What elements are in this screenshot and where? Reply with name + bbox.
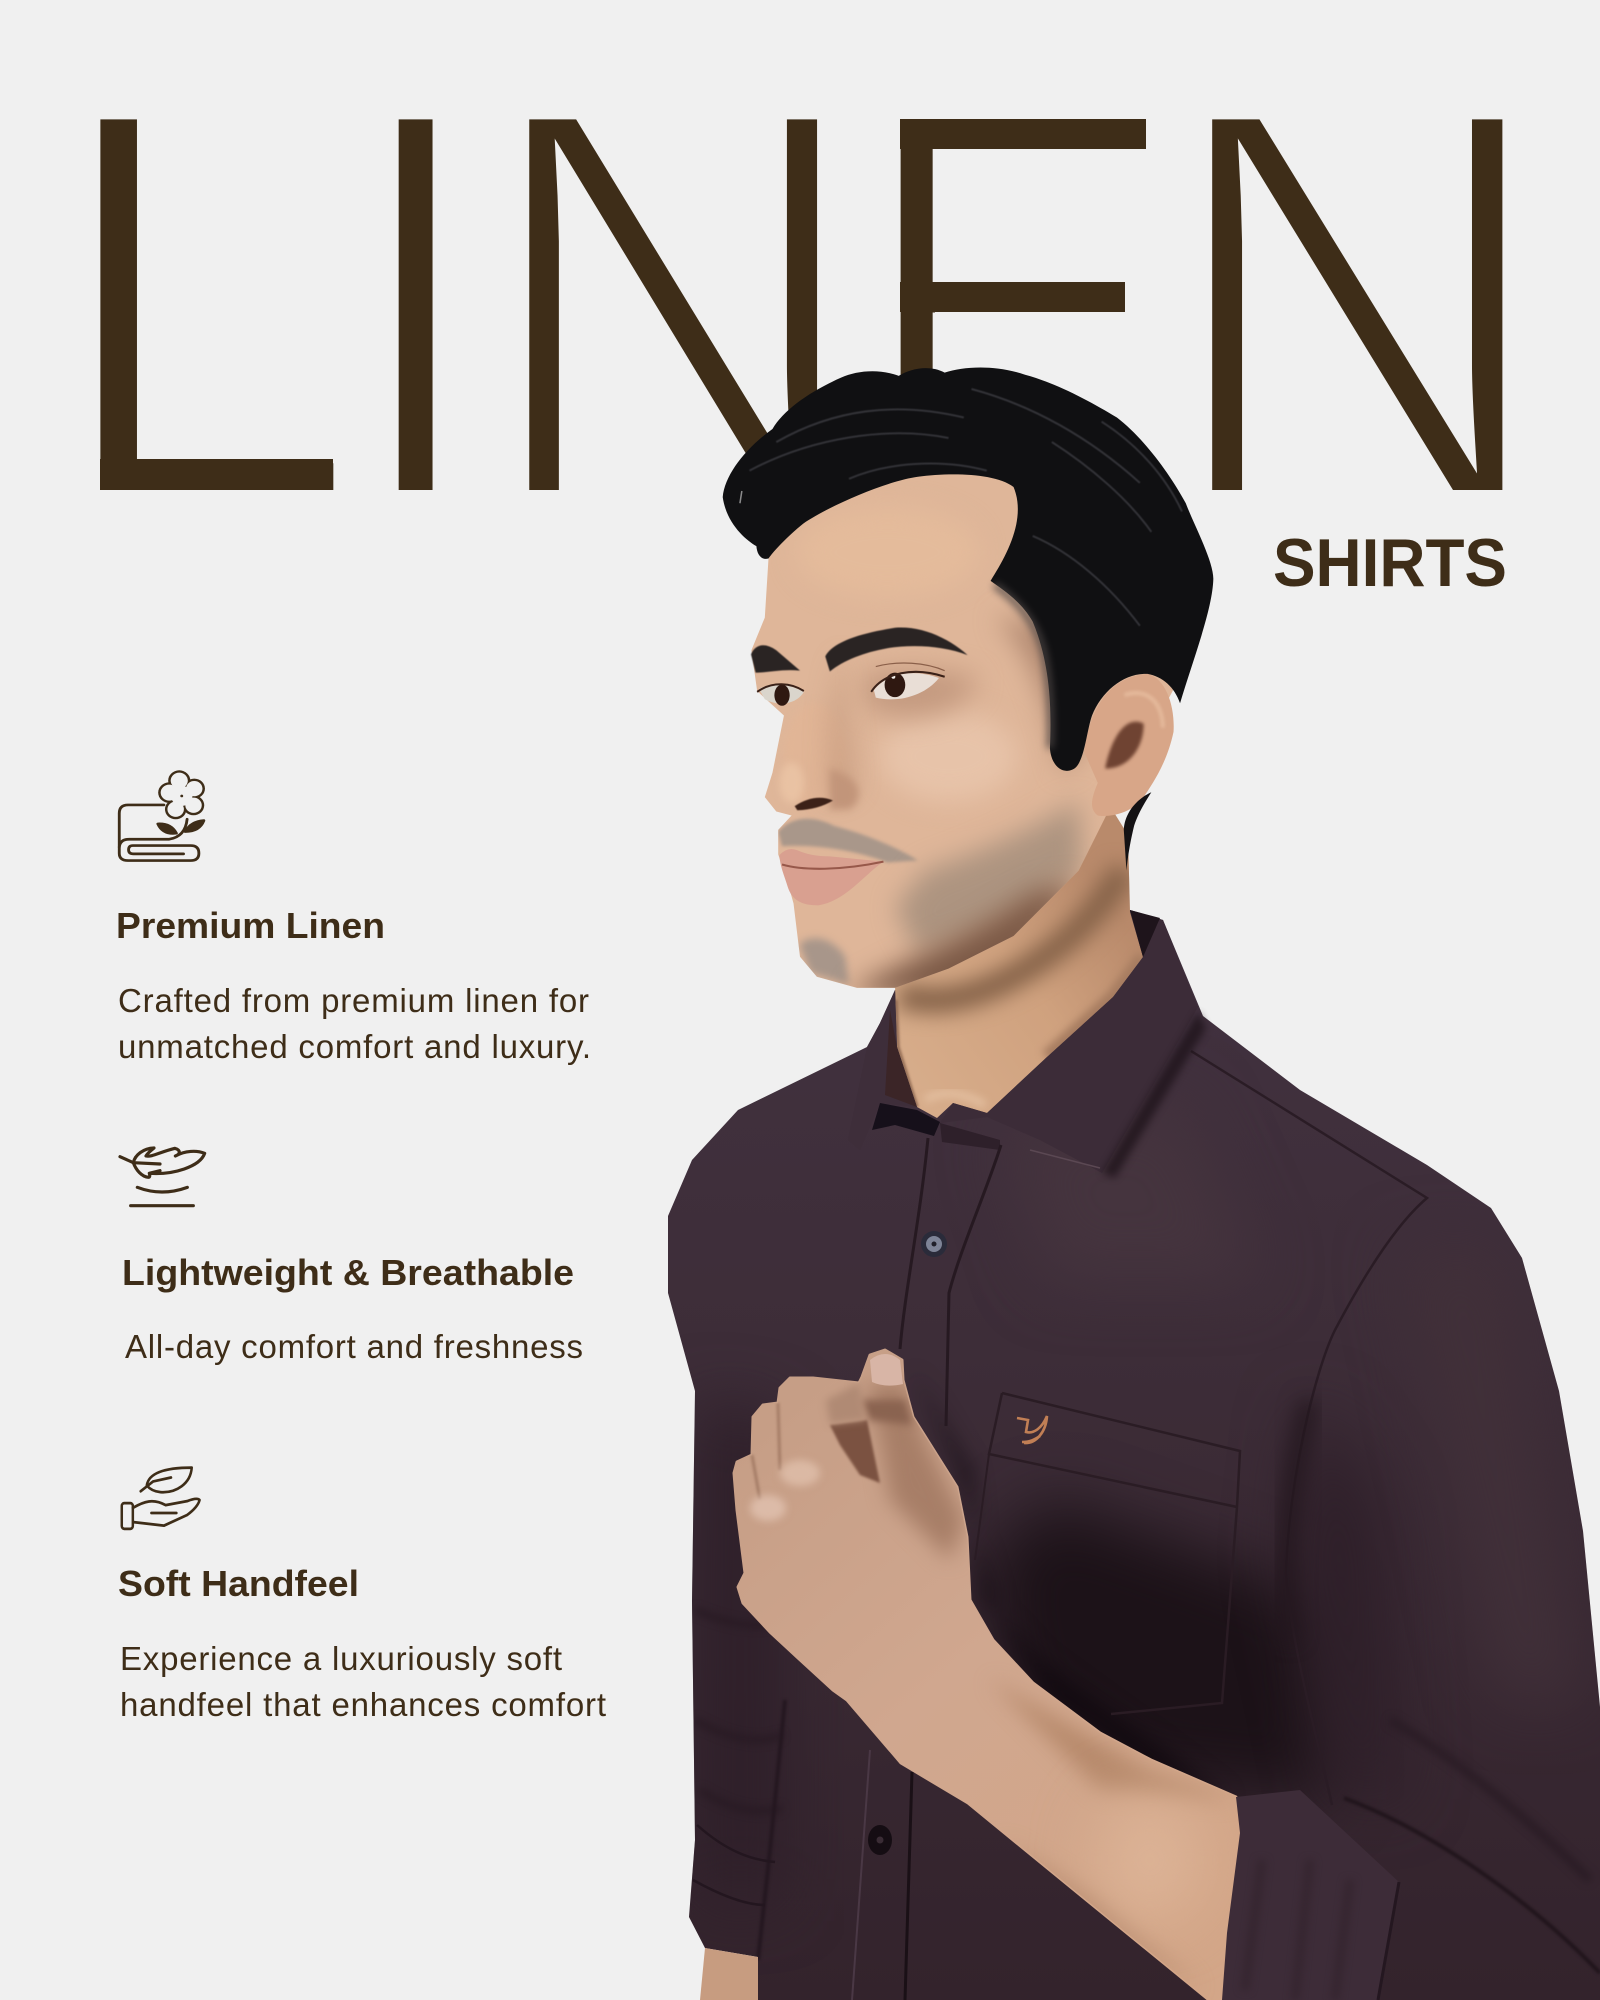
face (751, 462, 1186, 1001)
heading: Lightweight & Breathable (122, 1252, 574, 1293)
ear (1084, 674, 1174, 816)
icon: hand with leaf (122, 1468, 200, 1529)
description: Experience a luxuriously soft (120, 1640, 562, 1677)
description: unmatched comfort and luxury. (118, 1028, 591, 1065)
rolled sleeve cuff (1222, 1790, 1399, 2000)
title: LINEN: E (853, 0, 1183, 618)
thumbnail (870, 1354, 903, 1386)
lips (779, 849, 883, 905)
title: LINEN: N (477, 0, 869, 618)
neck (895, 790, 1143, 1118)
nostril wing (830, 769, 859, 809)
sleeve seam and yoke (1190, 1050, 1429, 1410)
eyes (874, 673, 939, 699)
icon: feather (120, 1148, 205, 1206)
feature: Soft Handfeel (118, 1468, 606, 1723)
pocket and logo (975, 1393, 1240, 1714)
nose tip highlight (781, 765, 803, 801)
left sleeve folds (695, 1610, 785, 1811)
subtitle: SHIRTS: SHIRTS (1273, 525, 1507, 601)
feature: Premium Linen (116, 770, 591, 1065)
title: LINEN: L (46, 0, 360, 618)
placket and button (852, 1123, 1001, 2000)
model shirt (668, 910, 1600, 2000)
right sleeve folds (1344, 1798, 1600, 1973)
model hand and forearm (734, 1350, 1240, 2000)
hair (723, 368, 1213, 871)
arm shade (1006, 1690, 1211, 1800)
feature: Lightweight & Breathable (120, 1148, 583, 1365)
heading: Soft Handfeel (118, 1563, 359, 1604)
nostril (795, 798, 833, 810)
description: Crafted from premium linen for (118, 982, 589, 1019)
stubble (778, 819, 918, 862)
title: LINEN (46, 0, 1555, 618)
title: LINEN: I (343, 0, 488, 618)
eyebrows (751, 645, 800, 673)
eye socket shade (864, 669, 979, 717)
icon: towel with flower (119, 770, 205, 861)
collar (848, 910, 1206, 1178)
other hand at bottom edge (700, 1948, 758, 2000)
temple and sideburn side shade (994, 618, 1082, 773)
description: All-day comfort and freshness (125, 1328, 583, 1365)
description: handfeel that enhances comfort (120, 1686, 606, 1723)
model photo illustration (668, 368, 1600, 2000)
description (120, 1640, 606, 1723)
finger gap (830, 1420, 880, 1483)
description (118, 982, 591, 1065)
heading: Premium Linen (116, 905, 385, 946)
title: LINEN: N (1160, 0, 1555, 618)
thumb shade (866, 1380, 965, 1560)
knuckles (780, 1460, 820, 1486)
